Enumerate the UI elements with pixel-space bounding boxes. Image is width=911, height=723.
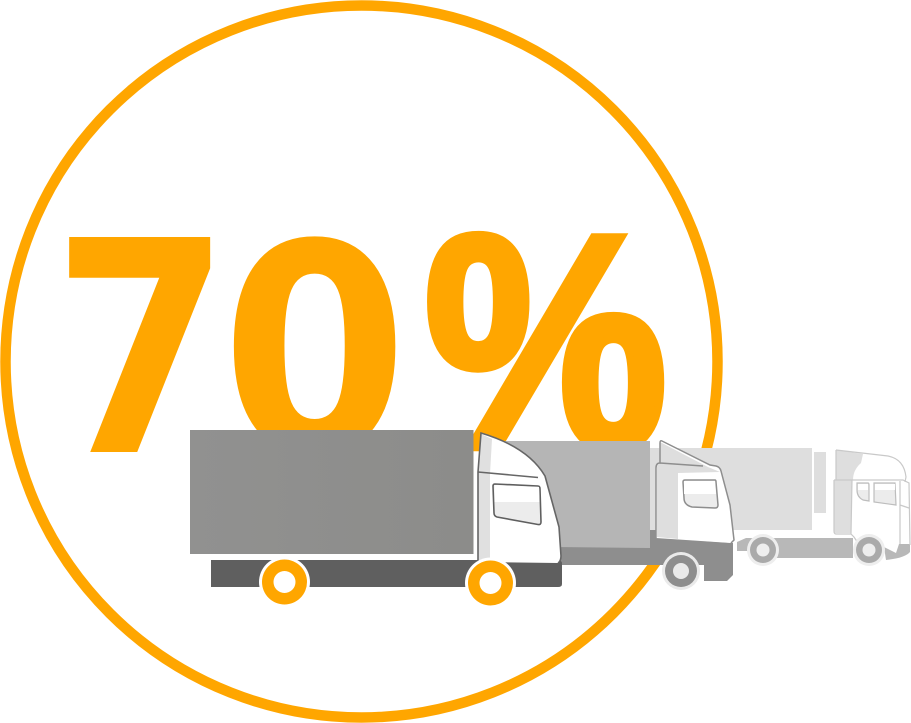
percentage text: %	[424, 173, 668, 512]
coupling	[650, 530, 656, 538]
wheel	[662, 552, 700, 590]
chassis band	[555, 537, 733, 581]
percentage text	[52, 173, 668, 522]
chassis	[737, 538, 853, 558]
truck: front	[190, 430, 562, 608]
cab window	[683, 480, 718, 508]
percentage text: 0	[221, 183, 408, 522]
cargo box	[505, 441, 650, 548]
truck: middle	[505, 441, 734, 590]
wheels	[747, 534, 885, 566]
percentage text: 7	[52, 179, 231, 522]
cab	[656, 441, 734, 543]
orange circle ring	[6, 6, 718, 718]
chassis	[211, 560, 562, 587]
cab windows	[857, 483, 869, 501]
cab	[478, 433, 561, 563]
cargo box	[650, 448, 812, 530]
cab	[834, 450, 910, 560]
rear cab strip	[814, 452, 826, 513]
cargo box	[190, 430, 474, 554]
wheels	[259, 556, 516, 608]
truck: far, palest	[650, 448, 910, 566]
cab window	[493, 484, 541, 525]
